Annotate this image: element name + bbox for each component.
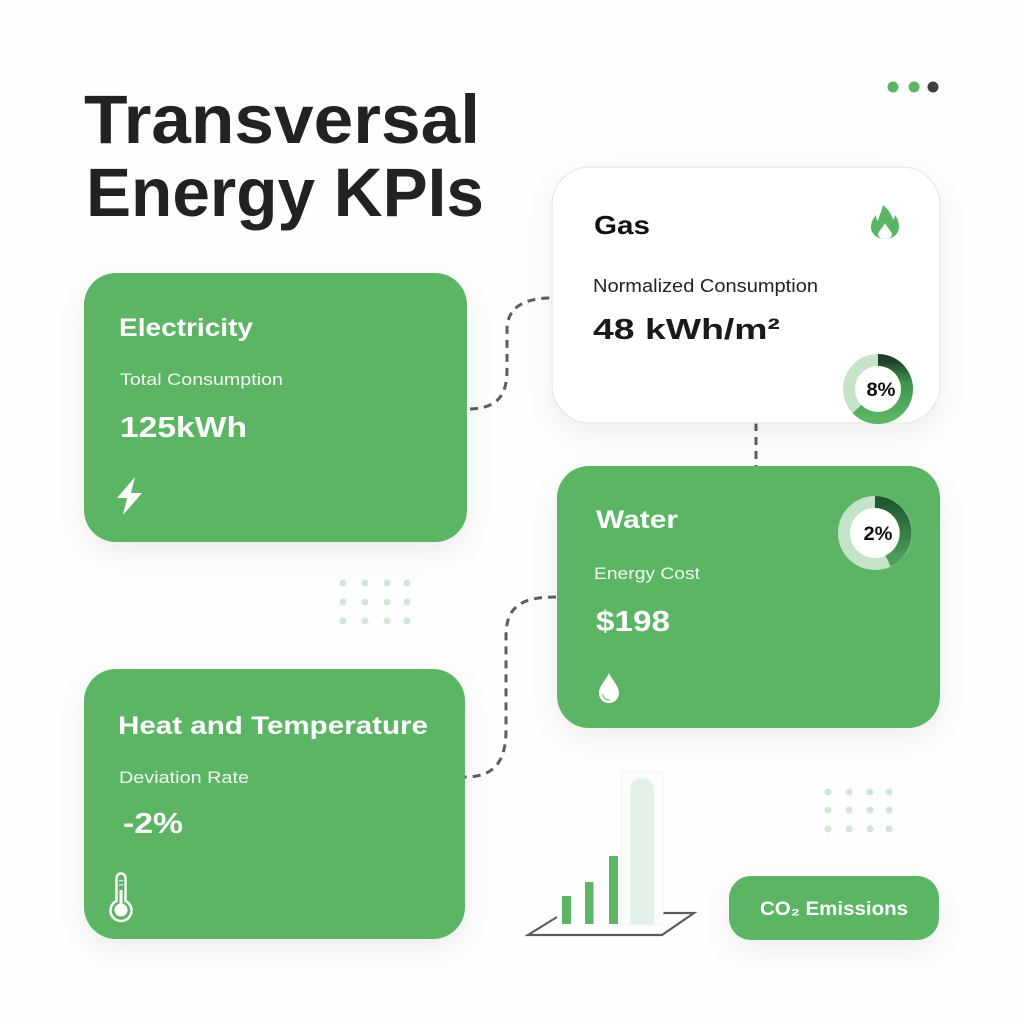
gas heading: Gas bbox=[594, 210, 650, 240]
water heading: Water bbox=[596, 506, 678, 534]
icon: lightning bolt bbox=[117, 477, 142, 515]
gas value: 48 kWh/m² bbox=[593, 314, 780, 346]
icon: water drop bbox=[599, 673, 619, 703]
water label: Energy Cost bbox=[594, 564, 700, 583]
donut: 2 percent bbox=[844, 502, 906, 564]
heat label: Deviation Rate bbox=[119, 768, 249, 787]
title: Transversal bbox=[84, 81, 480, 158]
panel: water bbox=[557, 466, 940, 728]
donut: 8 percent: 8% bbox=[866, 380, 896, 401]
gas label: Normalized Consumption bbox=[593, 276, 818, 296]
badge: co2 emissions: CO₂ Emissions bbox=[760, 899, 908, 920]
panel: gas bbox=[552, 167, 940, 423]
electricity value: 125kWh bbox=[120, 412, 247, 444]
status dots bbox=[888, 82, 938, 92]
heat heading: Heat and Temperature bbox=[118, 712, 428, 740]
electricity label: Total Consumption bbox=[120, 370, 283, 389]
dot grid: lower right bbox=[824, 788, 892, 832]
title bbox=[84, 81, 484, 231]
dot grid: middle bbox=[340, 580, 410, 624]
donut: 2 percent: 2% bbox=[864, 524, 893, 545]
badge: co2 emissions bbox=[729, 876, 939, 940]
donut: 8 percent bbox=[849, 360, 907, 418]
panel: heat and temperature bbox=[84, 669, 465, 939]
electricity heading: Electricity bbox=[119, 314, 253, 342]
title: Energy KPIs bbox=[86, 154, 484, 231]
icon: thermometer bbox=[110, 874, 132, 921]
icon: flame bbox=[871, 205, 899, 239]
water value: $198 bbox=[596, 606, 670, 638]
connectors bbox=[465, 298, 756, 777]
heat value: -2% bbox=[123, 808, 183, 840]
panel: electricity bbox=[84, 273, 467, 542]
bar chart bbox=[528, 772, 694, 935]
